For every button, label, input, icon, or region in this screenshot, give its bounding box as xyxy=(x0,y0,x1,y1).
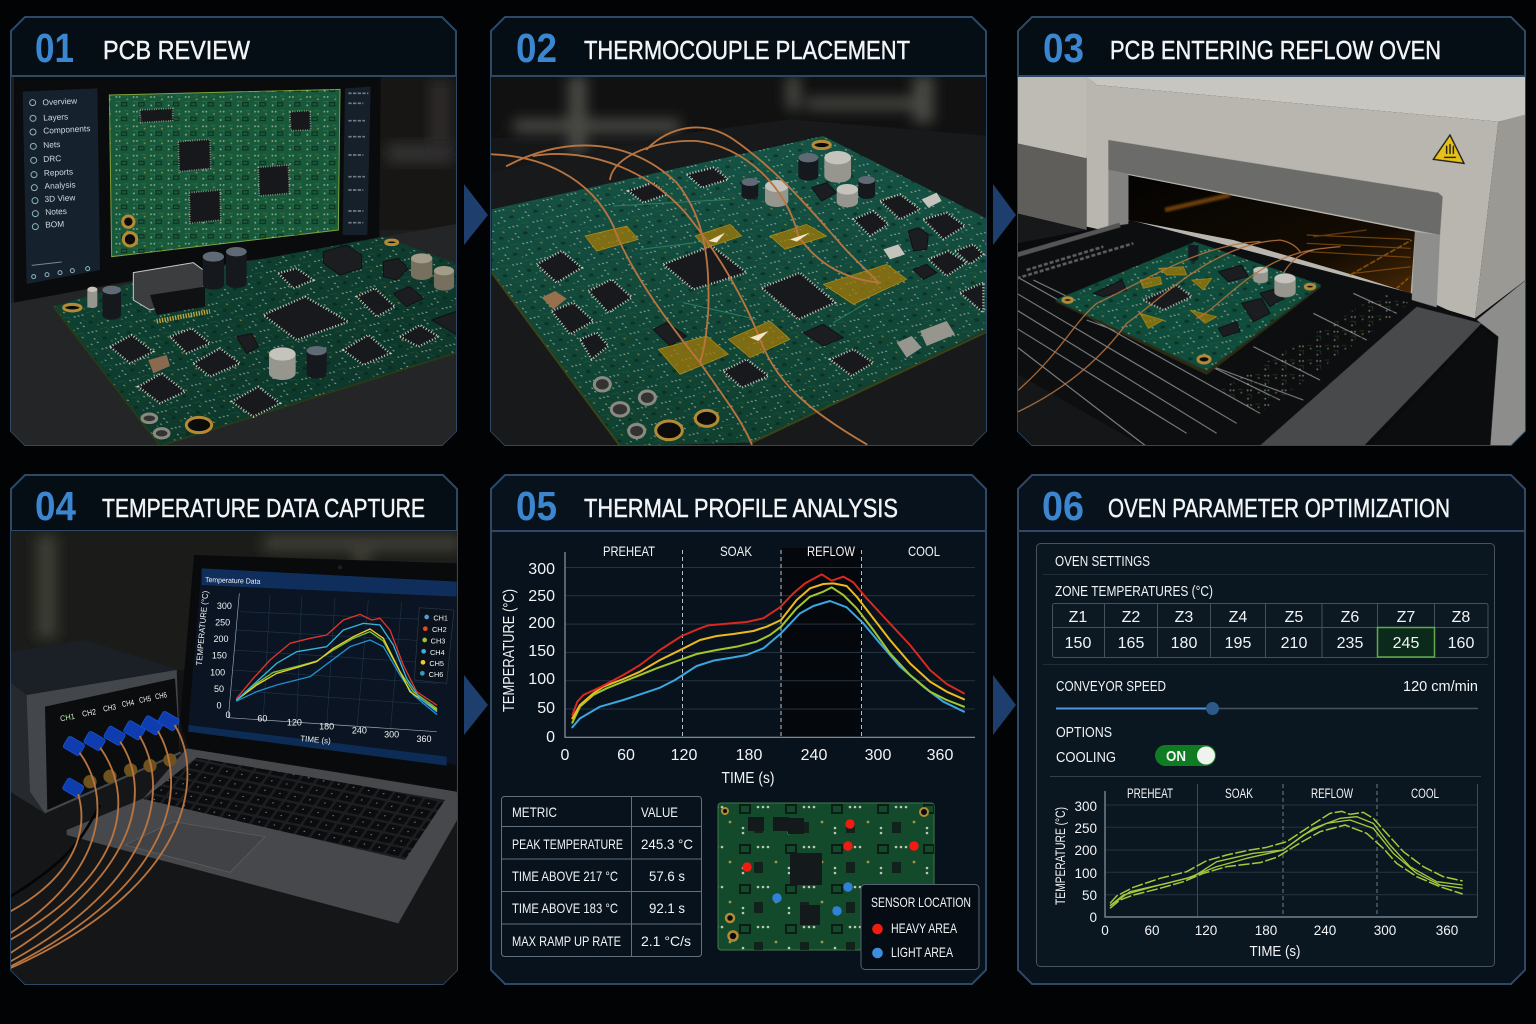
board xyxy=(53,237,460,446)
board on conveyor xyxy=(1056,286,1322,375)
arrow 2 to 3 xyxy=(993,184,1016,245)
laptop chart: TIME (s) xyxy=(300,734,332,746)
step number 03: 03 xyxy=(1043,25,1084,71)
monitor navigation list: Components xyxy=(43,123,91,136)
monitor navigation list: DRC xyxy=(43,153,61,164)
optimized profile chart: 100 xyxy=(1074,866,1097,881)
optimized profile chart: 240 xyxy=(1314,923,1336,938)
thermal profile chart: 360 xyxy=(927,747,953,764)
cooling toggle xyxy=(1155,745,1216,766)
conveyor xyxy=(1017,220,1477,450)
arrow 4 to 5 xyxy=(464,675,488,735)
optimized profile chart: TEMPERATURE (°C) xyxy=(1053,807,1068,905)
optimized profile chart: 120 xyxy=(1195,923,1217,938)
oven settings card: OVEN SETTINGS xyxy=(1055,553,1150,570)
laptop chart: 180 xyxy=(319,722,334,732)
laptop legend: CH5 xyxy=(429,659,444,668)
conveyor slider xyxy=(1056,702,1478,715)
laptop chart: 0 xyxy=(216,701,221,711)
oven settings card: 120 cm/min xyxy=(1403,678,1478,695)
monitor navigation list: BOM xyxy=(45,219,64,230)
step number 06: 06 xyxy=(1042,483,1084,529)
sensor legend xyxy=(861,884,979,970)
laptop chart: TEMPERATURE (°C) xyxy=(194,590,210,666)
panel 4: temperature data capture xyxy=(10,475,460,985)
photo: oven entrance and conveyor xyxy=(1017,77,1533,453)
optimized profile chart: 360 xyxy=(1436,923,1458,938)
laptop chart xyxy=(194,590,440,746)
panel 1: PCB review xyxy=(10,17,460,453)
laptop chart: 300 xyxy=(384,730,399,740)
thermal profile chart: 180 xyxy=(736,747,762,764)
conveyor slats xyxy=(1017,225,1397,447)
thermal profile chart: REFLOW xyxy=(807,543,856,559)
thermal profile chart: TEMPERATURE (°C) xyxy=(501,589,518,712)
heading: PCB entering reflow oven: PCB ENTERING REFLOW OVEN xyxy=(1110,35,1441,65)
thermal profile chart: TIME (s) xyxy=(722,770,774,787)
data logger xyxy=(11,640,178,695)
thermal profile chart: SOAK xyxy=(720,543,753,559)
thermal profile chart: 150 xyxy=(528,643,555,660)
laptop chart: 300 xyxy=(217,601,232,611)
thermal profile chart: 300 xyxy=(865,747,891,764)
laptop screen xyxy=(180,555,457,792)
silver connector xyxy=(133,263,203,310)
laptop legend: CH1 xyxy=(433,613,448,622)
monitor navigation list xyxy=(30,93,368,279)
optimized profile chart: 300 xyxy=(1074,799,1097,814)
optimized profile chart: COOL xyxy=(1411,786,1439,801)
laptop chart: 150 xyxy=(212,651,227,661)
thermal profile chart: 0 xyxy=(561,747,570,764)
heading: PCB review: PCB REVIEW xyxy=(103,35,250,65)
laptop chart: 100 xyxy=(210,667,225,677)
thermal profile chart: 0 xyxy=(546,729,555,746)
monitor navigation list: Layers xyxy=(43,111,68,123)
thermal profile chart: 60 xyxy=(617,747,635,764)
oven casing xyxy=(1087,77,1530,122)
monitor navigation list: Reports xyxy=(44,166,73,178)
sensor legend: SENSOR LOCATION xyxy=(871,894,971,910)
sensor legend: LIGHT AREA xyxy=(891,944,953,960)
laptop chart: 360 xyxy=(416,734,431,744)
thermal profile chart: 50 xyxy=(537,700,555,717)
oven settings card: ZONE TEMPERATURES (°C) xyxy=(1055,583,1213,600)
zone temperature table: 210 xyxy=(1281,635,1307,652)
laptop legend: CH2 xyxy=(432,625,447,634)
zone temperature table: 165 xyxy=(1118,635,1144,652)
optimized profile chart: SOAK xyxy=(1225,786,1253,801)
metrics table: 57.6 s xyxy=(649,868,685,884)
cooling toggle: ON xyxy=(1166,748,1186,765)
zone temperature table: Z3 xyxy=(1175,609,1193,626)
photo: data logger and laptop: CH3 xyxy=(102,702,117,714)
thermal profile chart: 240 xyxy=(801,747,827,764)
step number 01: 01 xyxy=(35,25,74,71)
oven settings card: OPTIONS xyxy=(1056,724,1112,741)
photo: data logger and laptop xyxy=(10,530,460,985)
black cable xyxy=(10,805,100,897)
step number 05: 05 xyxy=(516,483,557,529)
laptop base xyxy=(67,748,460,923)
photo: data logger and laptop: CH4 xyxy=(121,698,135,709)
panel 5: thermal profile analysis xyxy=(491,475,986,984)
thermal profile chart: COOL xyxy=(908,543,940,559)
optimized profile chart: 50 xyxy=(1082,888,1097,903)
monitor navigation list: Notes xyxy=(45,206,67,217)
photo: data logger and laptop: CH6 xyxy=(154,690,168,701)
optimized profile chart: 0 xyxy=(1089,910,1097,925)
panel 2: thermocouple placement xyxy=(490,17,990,449)
zone temperature table: 245 xyxy=(1393,635,1419,652)
metrics table: 245.3 °C xyxy=(641,836,693,852)
monitor navigation list: Nets xyxy=(43,139,61,150)
laptop chart: 50 xyxy=(214,684,224,694)
step number 02: 02 xyxy=(516,25,557,71)
oven settings card: COOLING xyxy=(1056,749,1116,766)
thermal profile chart: 250 xyxy=(528,588,555,605)
metrics table: 92.1 s xyxy=(649,900,685,916)
photo: board with thermocouple wires xyxy=(490,75,990,449)
optimized profile chart: REFLOW xyxy=(1311,786,1353,801)
laptop legend: CH6 xyxy=(429,670,443,679)
zone temperature table: 195 xyxy=(1225,635,1251,652)
heading: thermal profile analysis: THERMAL PROFILE ANALYSIS xyxy=(584,493,898,523)
monitor navigation list: Analysis xyxy=(44,179,76,191)
thermal profile chart: 100 xyxy=(528,671,555,688)
laptop chart: 60 xyxy=(257,713,267,723)
laptop chart: 250 xyxy=(215,618,230,628)
thermal profile chart: 120 xyxy=(671,747,697,764)
step number 04: 04 xyxy=(35,483,76,529)
optimized profile chart: TIME (s) xyxy=(1250,943,1300,960)
oven settings card xyxy=(1036,544,1494,966)
zone temperature table: Z7 xyxy=(1397,609,1415,626)
zone temperature table: Z2 xyxy=(1122,609,1140,626)
photo: PCB with review monitor xyxy=(10,77,460,453)
zone temperature table: Z5 xyxy=(1285,609,1303,626)
capacitors xyxy=(824,158,851,183)
arrow 1 to 2 xyxy=(464,184,488,245)
optimized profile chart: 200 xyxy=(1074,843,1097,858)
right conveyor cover xyxy=(1255,307,1482,450)
optimized profile chart: 0 xyxy=(1101,923,1109,938)
photo: data logger and laptop: CH5 xyxy=(138,694,152,705)
thermal profile chart: 300 xyxy=(528,561,555,578)
sensor location board xyxy=(718,803,934,950)
laptop header: Temperature Data xyxy=(205,575,261,586)
optimized profile chart: PREHEAT xyxy=(1127,786,1173,801)
laptop legend: CH3 xyxy=(431,636,445,645)
metrics table: PEAK TEMPERATURE xyxy=(512,836,623,852)
optimized profile chart: 300 xyxy=(1374,923,1396,938)
laptop legend: CH4 xyxy=(430,648,445,657)
metrics table: TIME ABOVE 183 °C xyxy=(512,900,618,916)
laptop legend xyxy=(414,608,454,683)
capacitors xyxy=(203,257,224,290)
monitor navigation list: 3D View xyxy=(44,192,77,204)
thermal profile chart: PREHEAT xyxy=(603,543,655,559)
photo: data logger and laptop: CH2 xyxy=(81,707,97,719)
sensor legend: HEAVY AREA xyxy=(891,920,957,936)
arrow 5 to 6 xyxy=(993,675,1016,735)
optimized profile chart xyxy=(1053,784,1478,960)
optimized profile chart: 60 xyxy=(1144,923,1160,938)
optimized profile chart: 250 xyxy=(1074,821,1097,836)
metrics table: TIME ABOVE 217 °C xyxy=(512,868,618,884)
photo: data logger and laptop: CH1 xyxy=(59,712,76,723)
laptop chart: 200 xyxy=(213,634,228,644)
heading: temperature data capture: TEMPERATURE DATA CAPTURE xyxy=(102,493,425,523)
zone temperature table: 180 xyxy=(1171,635,1197,652)
zone temperature table: 235 xyxy=(1337,635,1363,652)
metrics table: MAX RAMP UP RATE xyxy=(512,933,621,949)
monitor xyxy=(14,77,381,303)
thermocouple wires xyxy=(492,154,752,444)
panel 6: oven parameter optimization xyxy=(1018,475,1525,984)
zone temperature table: Z1 xyxy=(1069,609,1087,626)
zone temperature table: 150 xyxy=(1065,635,1091,652)
thermal profile chart: 200 xyxy=(528,615,555,632)
laptop chart: 240 xyxy=(352,726,367,736)
copper wires xyxy=(10,726,187,968)
silver parts xyxy=(920,321,955,346)
heading: thermocouple placement: THERMOCOUPLE PLACEMENT xyxy=(584,35,910,65)
thermal profile chart xyxy=(501,543,975,787)
optimized profile chart: 180 xyxy=(1255,923,1277,938)
metrics table: 2.1 °C/s xyxy=(641,933,691,949)
metrics table xyxy=(502,796,702,956)
laptop chart: 120 xyxy=(287,718,302,728)
zone temperature table: Z4 xyxy=(1229,609,1247,626)
zone temperature table: Z6 xyxy=(1341,609,1359,626)
kapton tape xyxy=(585,226,638,251)
zone temperature table: Z8 xyxy=(1452,609,1470,626)
oven settings card: CONVEYOR SPEED xyxy=(1056,678,1166,695)
laptop chart: 0 xyxy=(225,710,230,720)
warning sign xyxy=(1433,135,1464,163)
zone temperature table xyxy=(1052,604,1488,658)
oven opening xyxy=(1128,175,1415,293)
zone temperature table: 160 xyxy=(1448,635,1474,652)
heading: oven parameter optimization: OVEN PARAMETER OPTIMIZATION xyxy=(1108,493,1450,523)
metrics table: VALUE xyxy=(641,804,678,820)
panel 3: PCB entering reflow oven xyxy=(1017,17,1533,453)
monitor navigation list: Overview xyxy=(42,95,78,107)
wires xyxy=(1018,240,1340,412)
metrics table: METRIC xyxy=(512,804,557,820)
blue connectors xyxy=(62,711,180,798)
